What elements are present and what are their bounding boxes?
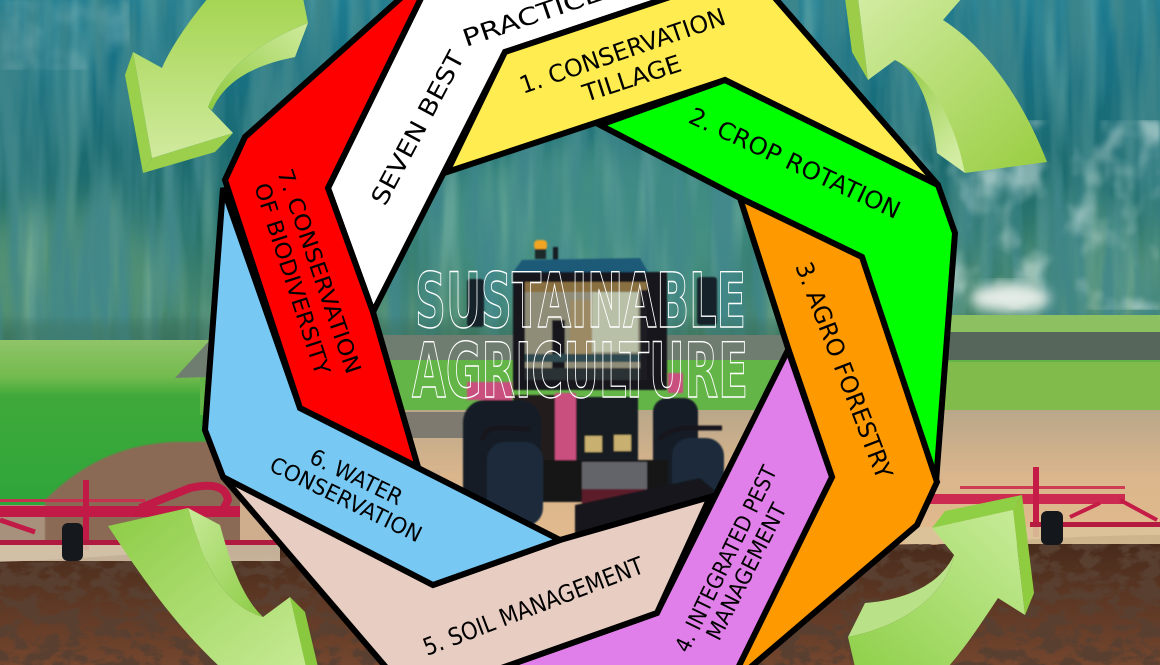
tractor: headlights	[585, 435, 631, 452]
label: 6 water conservation: 6. WATER	[305, 445, 406, 511]
segment: white seven best practices	[328, 0, 700, 312]
tractor: fenders	[483, 428, 722, 440]
tractor: amber beacon	[534, 240, 547, 259]
label: 7 conservation of biodiversity: 7. CONSERVATION	[271, 166, 365, 377]
label: 1 conservation tillage: TILLAGE	[578, 50, 685, 108]
tractor: undercarriage	[575, 478, 720, 535]
label: seven best practices: SEVEN BEST	[366, 46, 470, 210]
title: sustainable agriculture: SUSTAINABLE	[415, 256, 746, 345]
label: seven best practices	[366, 0, 624, 210]
tractor: exhaust pipe	[553, 247, 558, 277]
arrow: top left	[125, 0, 308, 173]
segment: 3 agro forestry, orange	[735, 198, 937, 665]
tractor: cab	[513, 272, 667, 390]
label: 6 water conservation: CONSERVATION	[265, 453, 426, 548]
tractor: right rear tyre	[653, 398, 724, 498]
arrow: top right	[845, 0, 1047, 173]
segment: 6 water conservation, blue	[205, 188, 560, 585]
label: 1 conservation tillage: 1. CONSERVATION	[516, 3, 729, 100]
forest backdrop	[0, 0, 1160, 345]
tractor: hood and grille	[576, 397, 638, 463]
label: 5 soil management: 5. SOIL MANAGEMENT	[419, 551, 648, 662]
segment: 2 crop rotation, green	[600, 80, 955, 482]
title: sustainable agriculture	[412, 256, 748, 415]
red harrow, right	[905, 467, 1160, 545]
label: 4 integrated pest management: MANAGEMENT	[702, 499, 793, 645]
segment: 5 soil management, beige	[223, 477, 710, 665]
arrow: bottom left	[108, 508, 318, 665]
label: 4 integrated pest management: 4. INTEGRATED PEST	[671, 462, 783, 657]
arrow: bottom right	[848, 495, 1034, 665]
tractor: pink body panels	[467, 373, 683, 467]
tractor: front weight	[582, 462, 647, 505]
ring: seven practice segments	[205, 0, 955, 665]
tractor: lower chassis	[543, 460, 668, 502]
tractor: mirrors	[467, 277, 717, 327]
green field and dusty ground	[0, 315, 1160, 562]
segment: 4 integrated pest management, purple	[490, 350, 832, 665]
title: sustainable agriculture: AGRICULTURE	[412, 326, 748, 415]
segment: 1 conservation tillage, yellow	[447, 0, 938, 185]
label: 2 crop rotation: 2. CROP ROTATION	[684, 102, 905, 225]
label: 7 conservation of biodiversity: OF BIODIVERSITY	[248, 180, 334, 379]
ploughed soil	[0, 534, 1160, 665]
tractor: engine shroud	[512, 395, 555, 470]
tractor: left rear tyre	[463, 400, 543, 526]
segment: 7 conservation of biodiversity, red	[225, 0, 426, 467]
red harrow, left	[0, 480, 280, 561]
tractor	[463, 240, 724, 535]
label: 3 agro forestry: 3. AGRO FORESTRY	[789, 258, 898, 483]
tractor: roof	[513, 258, 648, 272]
